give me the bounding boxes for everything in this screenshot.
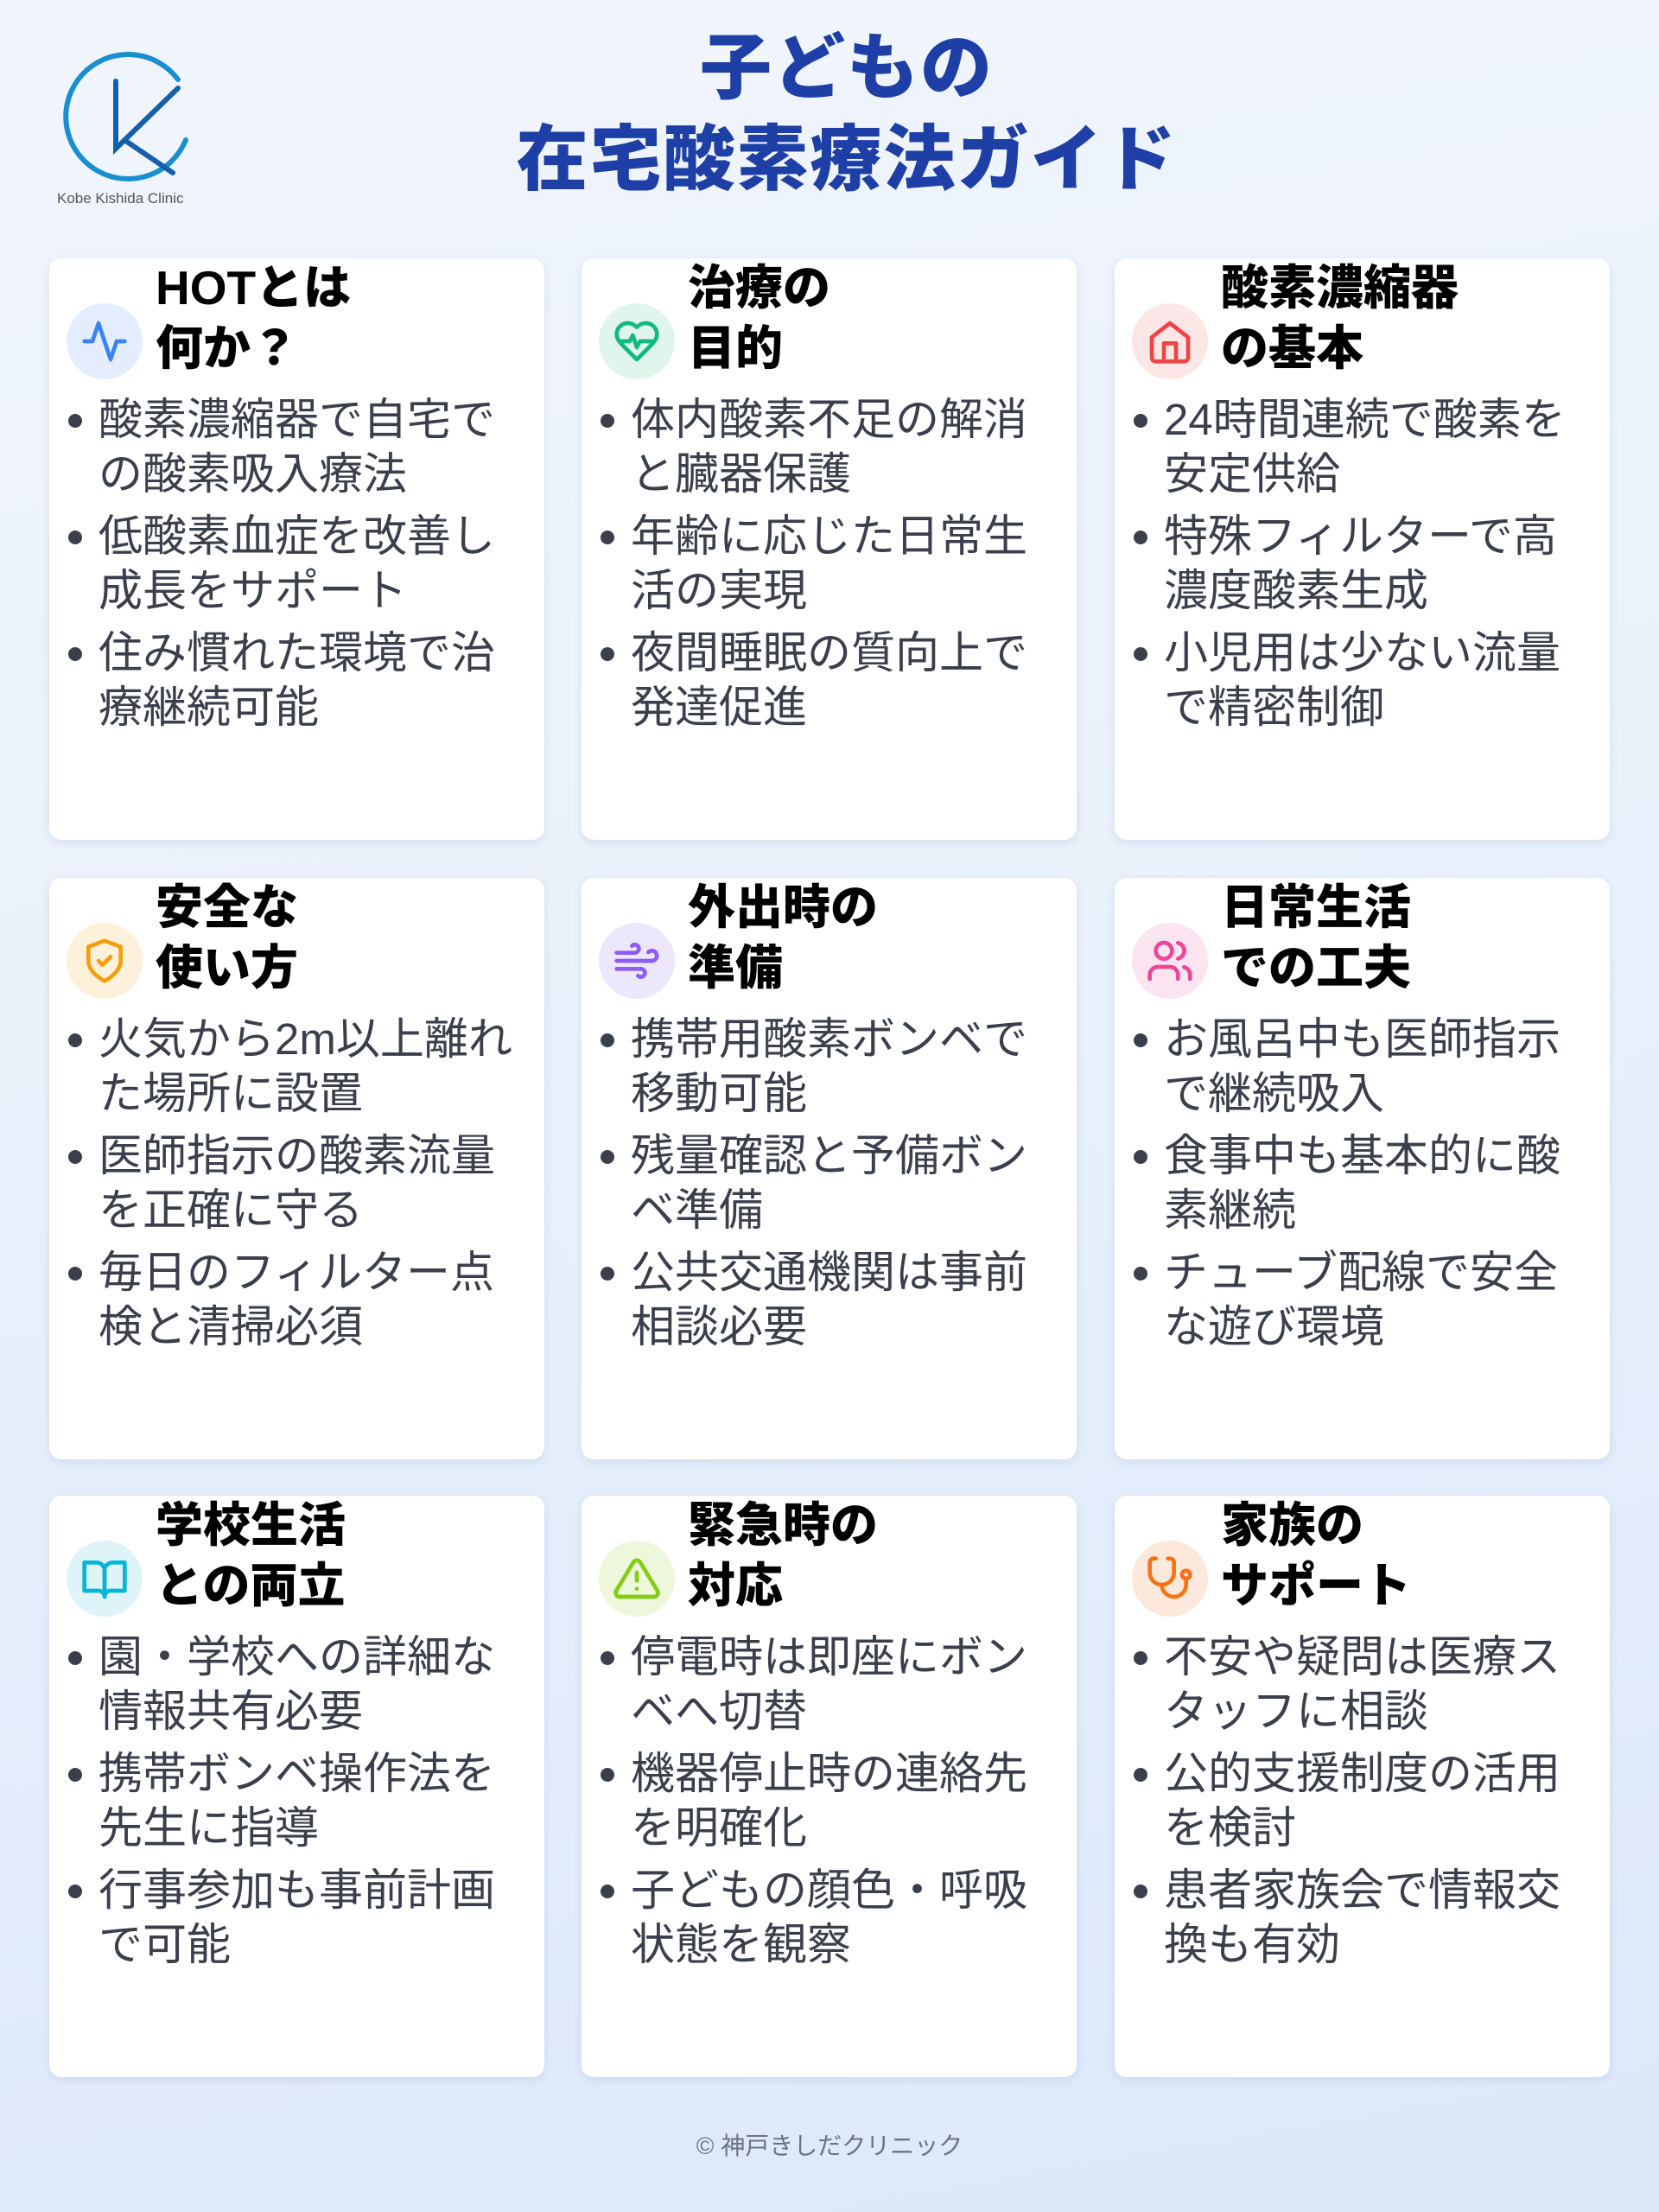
heading: 外出時の (688, 880, 878, 934)
heading: 日常生活 (1221, 880, 1411, 934)
panel: 酸素濃縮器の基本 (1115, 258, 1610, 840)
icon: house (1132, 303, 1208, 379)
heading (1221, 261, 1459, 375)
icon: shield (67, 923, 143, 999)
heading (156, 261, 351, 375)
bullets: 低酸素血症を改善し成長をサポート (99, 512, 495, 615)
heading: 緊急時の (688, 1498, 878, 1552)
bullets: 行事参加も事前計画で可能 (99, 1866, 495, 1969)
bullets: 園・学校への詳細な情報共有必要 (99, 1632, 495, 1736)
bullets: 酸素濃縮器で自宅での酸素吸入療法 (99, 395, 495, 499)
bullets: 携帯用酸素ボンベで移動可能 (631, 1014, 1027, 1118)
panel: 安全な使い方 (49, 878, 544, 1459)
bullets: 公的支援制度の活用を検討 (1164, 1749, 1560, 1853)
panel: 治療の目的 (582, 258, 1077, 840)
icon: activity (67, 303, 143, 379)
icon: wind (599, 923, 675, 999)
bullets: 停電時は即座にボンベへ切替 (631, 1632, 1027, 1736)
heading (688, 261, 830, 375)
icon: users (1132, 923, 1208, 999)
bullets: 体内酸素不足の解消と臓器保護 (631, 395, 1027, 499)
title (517, 28, 1177, 200)
bullets: チューブ配線で安全な遊び環境 (1164, 1248, 1558, 1351)
icon: heart pulse (599, 303, 675, 379)
bullets: 夜間睡眠の質向上で発達促進 (631, 628, 1027, 732)
bullets (68, 1632, 495, 1969)
heading: 学校生活 (156, 1498, 346, 1552)
heading: 使い方 (156, 941, 298, 995)
logo: Kobe Kishida Clinic (57, 190, 183, 207)
bullets: 医師指示の酸素流量を正確に守る (99, 1131, 495, 1235)
bullets: 子どもの顔色・呼吸状態を観察 (631, 1866, 1027, 1969)
footer: © 神戸きしだクリニック (696, 2133, 963, 2159)
bullets: 不安や疑問は医療スタッフに相談 (1164, 1632, 1560, 1736)
heading: 治療の (688, 261, 830, 315)
heading: HOTとは (156, 261, 351, 315)
bullets (601, 395, 1027, 732)
title: 在宅酸素療法ガイド (517, 119, 1177, 200)
title: 子どもの (700, 28, 994, 108)
bullets (1134, 395, 1566, 732)
bullets (68, 1014, 512, 1351)
bullets: 小児用は少ない流量で精密制御 (1164, 628, 1560, 732)
icon: book (67, 1541, 143, 1617)
panel: HOTとは (49, 258, 544, 840)
bullets: 年齢に応じた日常生活の実現 (631, 512, 1027, 615)
heading: 家族の (1221, 1498, 1363, 1552)
bullets: 患者家族会で情報交換も有効 (1164, 1866, 1560, 1969)
bullets: 24時間連続で酸素を安定供給 (1164, 395, 1566, 499)
bullets: お風呂中も医師指示で継続吸入 (1164, 1014, 1560, 1118)
bullets: 食事中も基本的に酸素継続 (1164, 1131, 1560, 1235)
heading: での工夫 (1221, 941, 1411, 995)
heading (156, 1498, 346, 1612)
heading: の基本 (1221, 321, 1363, 375)
heading: 何か？ (156, 321, 298, 375)
panel: 日常生活での工夫 (1115, 878, 1610, 1459)
heading: サポート (1221, 1559, 1411, 1612)
heading: 安全な (156, 880, 298, 934)
bullets: 住み慣れた環境で治療継続可能 (99, 628, 495, 732)
heading (688, 1498, 878, 1612)
bullets: 毎日のフィルター点検と清掃必須 (99, 1248, 494, 1351)
bullets (601, 1632, 1027, 1969)
heading (1221, 880, 1411, 995)
bullets (1134, 1014, 1560, 1351)
panel: 学校生活との両立 (49, 1496, 544, 2077)
logo (57, 52, 188, 207)
heading: 対応 (688, 1559, 783, 1612)
panel: 緊急時の対応 (582, 1496, 1077, 2077)
bullets: 機器停止時の連絡先を明確化 (631, 1749, 1027, 1853)
heading (688, 880, 878, 995)
heading (1221, 1498, 1411, 1612)
icon: warning (599, 1541, 675, 1617)
heading: 酸素濃縮器 (1221, 261, 1459, 315)
heading: との両立 (156, 1559, 345, 1612)
bullets: 公共交通機関は事前相談必要 (631, 1248, 1027, 1351)
panel: 家族のサポート (1115, 1496, 1610, 2077)
heading: 目的 (688, 321, 783, 375)
bullets (68, 395, 495, 732)
panel: 外出時の準備 (582, 878, 1077, 1459)
heading: 準備 (688, 941, 783, 995)
bullets: 特殊フィルターで高濃度酸素生成 (1164, 512, 1557, 615)
bullets (601, 1014, 1027, 1351)
bullets: 携帯ボンベ操作法を先生に指導 (99, 1749, 495, 1853)
icon: stethoscope (1132, 1541, 1208, 1617)
bullets: 残量確認と予備ボンベ準備 (631, 1131, 1027, 1235)
bullets (1134, 1632, 1560, 1969)
heading (156, 880, 298, 995)
bullets: 火気から2m以上離れた場所に設置 (99, 1014, 512, 1118)
